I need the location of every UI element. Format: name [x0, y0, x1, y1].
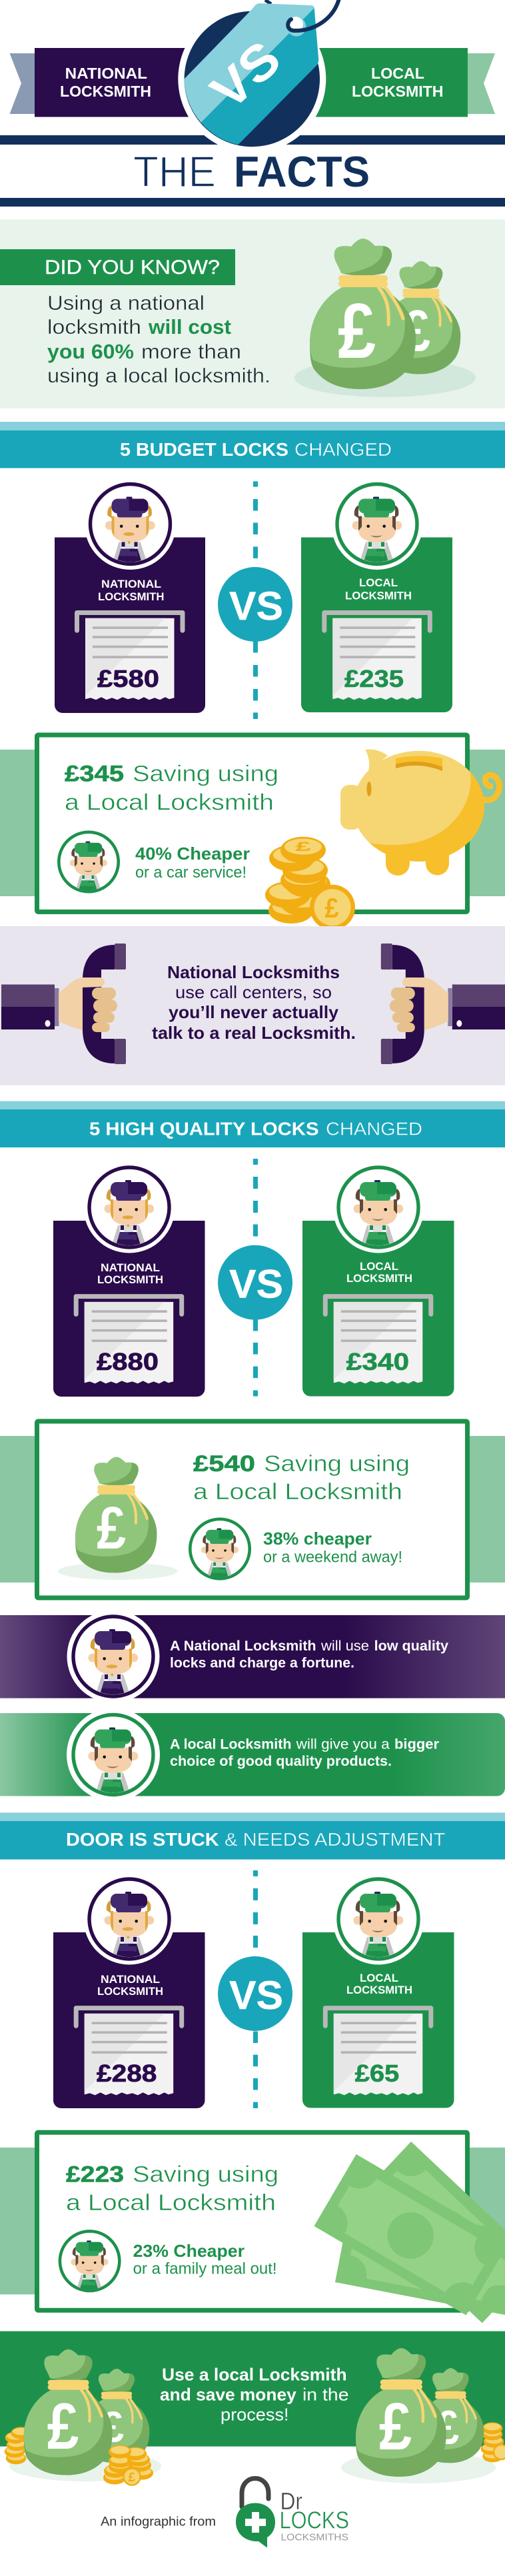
title: FACTS	[234, 147, 370, 196]
header rule bottom	[0, 198, 505, 207]
banner: local good quality	[0, 1708, 505, 1802]
saving headline: £540	[193, 1451, 255, 1477]
icon: coin stack: £	[325, 892, 338, 924]
VS price tag	[178, 0, 339, 153]
national label: LOCKSMITH	[97, 1274, 163, 1286]
national label: NATIONAL	[101, 1262, 160, 1274]
small local avatar	[59, 832, 119, 892]
call center text: you’ll never actually	[169, 1002, 339, 1022]
banner text: A National Locksmith	[170, 1638, 316, 1654]
section header: 5 high quality locks changed: CHANGED	[326, 1119, 422, 1139]
receipt £288	[76, 2008, 182, 2095]
national label	[97, 1262, 163, 1286]
header: local locksmith ribbon: LOCAL	[371, 65, 424, 82]
saving headline: a Local Locksmith	[65, 790, 274, 816]
VS price tag: VS	[200, 30, 292, 121]
footer text: in the	[302, 2385, 349, 2405]
footer text	[160, 2365, 349, 2424]
icon: money bags: £	[402, 298, 430, 364]
national label	[98, 578, 164, 603]
receipt £580: £580	[97, 665, 159, 692]
section header: 5 budget locks changed: CHANGED	[294, 439, 392, 460]
local label	[346, 1261, 412, 1285]
national label: LOCKSMITH	[98, 591, 164, 603]
23% cheaper text: or a family meal out!	[133, 2259, 277, 2277]
header: local locksmith ribbon	[316, 48, 495, 117]
icon: left money bags and coins: £	[100, 2402, 124, 2451]
footer text: and save money	[160, 2385, 296, 2405]
banner text: low quality	[374, 1638, 448, 1654]
saving headline: a Local Locksmith	[193, 1479, 402, 1505]
icon: money bags: £	[338, 287, 376, 374]
dashed divider section 3	[253, 1870, 258, 2108]
icon: right hand holding phone	[381, 944, 505, 1064]
did you know body text: will cost	[148, 315, 231, 338]
small local avatar	[190, 1519, 250, 1579]
did you know heading: DID YOU KNOW?	[45, 257, 220, 279]
receipt £880	[76, 1297, 182, 1383]
did you know body text: locksmith	[47, 315, 141, 338]
panel: call centers	[0, 926, 505, 1085]
local label: LOCAL	[360, 1261, 398, 1273]
local card: high quality locks	[302, 1162, 454, 1397]
icon: banknotes	[314, 2142, 505, 2323]
footer text: Use a local Locksmith	[162, 2365, 347, 2385]
icon: left money bags and coins: £	[47, 2389, 79, 2463]
national avatar	[67, 1610, 160, 1703]
section header: door is stuck: & NEEDS ADJUSTMENT	[225, 1829, 445, 1850]
receipt £340: £340	[346, 1348, 409, 1375]
icon: left money bags and coins: £	[128, 2471, 136, 2485]
banner text: will give you a	[296, 1736, 390, 1752]
call center text: use call centers, so	[175, 982, 332, 1002]
saving headline	[65, 761, 278, 816]
small local avatar	[60, 2232, 119, 2291]
saving headline: £223	[66, 2162, 124, 2187]
did you know body text: using a local locksmith.	[47, 364, 270, 387]
dashed divider section 2	[253, 1159, 258, 1397]
VS badge section 3	[218, 1956, 292, 2031]
local avatar	[67, 1708, 160, 1802]
local label: LOCAL	[359, 577, 398, 589]
icon: left hand holding phone	[1, 944, 126, 1064]
23% cheaper text	[133, 2241, 277, 2277]
national label	[97, 1974, 163, 1998]
call center text	[152, 962, 356, 1043]
icon: money bag: £	[97, 1495, 126, 1562]
dashed divider section 1	[253, 481, 258, 719]
saving headline	[193, 1451, 410, 1505]
did you know body text: more than	[141, 340, 241, 363]
banner text: bigger	[394, 1736, 439, 1752]
call center text: National Locksmiths	[167, 962, 340, 982]
local label: LOCKSMITH	[346, 1273, 412, 1285]
receipt £65	[325, 2008, 431, 2095]
local label: LOCKSMITH	[346, 1984, 412, 1996]
header: national locksmith ribbon: LOCKSMITH	[60, 83, 151, 100]
local label	[345, 577, 412, 602]
section header: 5 high quality locks changed: 5 HIGH QUALITY LOCKS	[89, 1119, 318, 1139]
banner: national low quality	[0, 1610, 505, 1703]
national label: NATIONAL	[101, 1974, 160, 1986]
icon: right money bags and coins: £	[436, 2401, 459, 2455]
section header: door is stuck	[0, 1812, 505, 1860]
saving headline: a Local Locksmith	[66, 2190, 276, 2216]
panel: did you know	[0, 219, 505, 408]
local avatar	[333, 1874, 424, 1964]
banner text: will use	[320, 1638, 369, 1654]
icon: right money bags and coins	[341, 2348, 505, 2483]
local avatar	[333, 1162, 424, 1253]
VS badge section 2	[218, 1245, 292, 1320]
icon: money bag	[57, 1457, 177, 1580]
40% cheaper text: or a car service!	[135, 864, 247, 882]
header: national locksmith ribbon	[9, 48, 189, 117]
logo: Dr Locks Locksmiths: LOCKS	[280, 2507, 349, 2534]
icon: coin stack: £	[295, 840, 312, 854]
icon: coin stack	[265, 837, 355, 930]
national label: LOCKSMITH	[97, 1986, 163, 1998]
VS badge section 1	[218, 567, 292, 642]
logo: Dr Locks Locksmiths: LOCKSMITHS	[281, 2532, 348, 2543]
38% cheaper text: or a weekend away!	[263, 1549, 402, 1566]
saving headline: Saving using	[133, 2162, 278, 2187]
national avatar	[85, 478, 176, 570]
national card: high quality locks	[53, 1162, 205, 1397]
local card: budget locks	[301, 478, 452, 712]
receipt £340	[325, 1297, 431, 1383]
40% cheaper text	[135, 844, 250, 882]
saving headline	[66, 2162, 278, 2216]
header: local locksmith ribbon: LOCKSMITH	[352, 83, 444, 100]
logo: Dr Locks Locksmiths	[236, 2479, 349, 2548]
section header: 5 high quality locks changed	[0, 1101, 505, 1147]
icon: right money bags and coins: £	[379, 2389, 412, 2464]
38% cheaper text: 38% cheaper	[263, 1529, 372, 1549]
section header: 5 budget locks changed: 5 BUDGET LOCKS	[120, 439, 288, 460]
receipt £235	[324, 613, 430, 700]
footer banner	[0, 2331, 505, 2485]
national card: door adjustment	[53, 1874, 205, 2108]
header rule top	[0, 135, 505, 145]
saving headline: £345	[65, 761, 124, 786]
VS badge section 3: VS	[229, 1973, 283, 2018]
banner text: A local Locksmith	[170, 1736, 291, 1752]
icon: piggy bank	[340, 749, 502, 876]
VS badge section 1: VS	[229, 584, 283, 628]
national avatar	[84, 1162, 175, 1253]
national avatar	[84, 1874, 175, 1964]
receipt £65: £65	[355, 2060, 399, 2087]
saving headline: Saving using	[264, 1451, 410, 1477]
section header: door is stuck: DOOR IS STUCK	[66, 1829, 219, 1850]
icon: left money bags and coins	[5, 2349, 161, 2485]
national label: NATIONAL	[101, 578, 161, 590]
receipt £580	[77, 613, 183, 700]
did you know body text	[47, 291, 270, 387]
title	[133, 147, 370, 196]
national card: budget locks	[55, 478, 205, 713]
receipt £235: £235	[344, 665, 404, 692]
banner text: locks and charge a fortune.	[170, 1655, 354, 1671]
panel: £223 saving	[0, 2132, 505, 2323]
banner text	[170, 1736, 439, 1769]
did you know heading	[0, 249, 235, 285]
38% cheaper text	[263, 1529, 402, 1566]
saving headline: Saving using	[133, 761, 278, 786]
panel: £540 saving	[0, 1421, 505, 1598]
header: national locksmith ribbon: NATIONAL	[65, 65, 147, 82]
section header: 5 budget locks changed	[0, 422, 505, 468]
call center text: talk to a real Locksmith.	[152, 1023, 356, 1043]
VS badge section 2: VS	[229, 1262, 283, 1307]
footer text: process!	[221, 2404, 289, 2424]
did you know body text: you 60%	[47, 340, 134, 363]
panel: £345 saving	[0, 733, 505, 930]
footer credit text: An infographic from	[101, 2515, 216, 2529]
banner text: choice of good quality products.	[170, 1754, 392, 1769]
local avatar	[332, 478, 422, 570]
local card: door adjustment	[302, 1874, 454, 2108]
title: THE	[133, 147, 216, 196]
receipt £880: £880	[97, 1348, 159, 1375]
banner text	[170, 1638, 448, 1671]
receipt £288: £288	[97, 2060, 157, 2087]
icon: money bags	[294, 239, 476, 397]
local label: LOCAL	[360, 1972, 398, 1984]
local label	[346, 1972, 412, 1996]
local label: LOCKSMITH	[345, 590, 412, 602]
23% cheaper text: 23% Cheaper	[133, 2241, 245, 2261]
did you know body text: Using a national	[47, 291, 205, 315]
logo: Dr Locks Locksmiths: Dr	[280, 2487, 302, 2515]
40% cheaper text: 40% Cheaper	[135, 844, 250, 864]
